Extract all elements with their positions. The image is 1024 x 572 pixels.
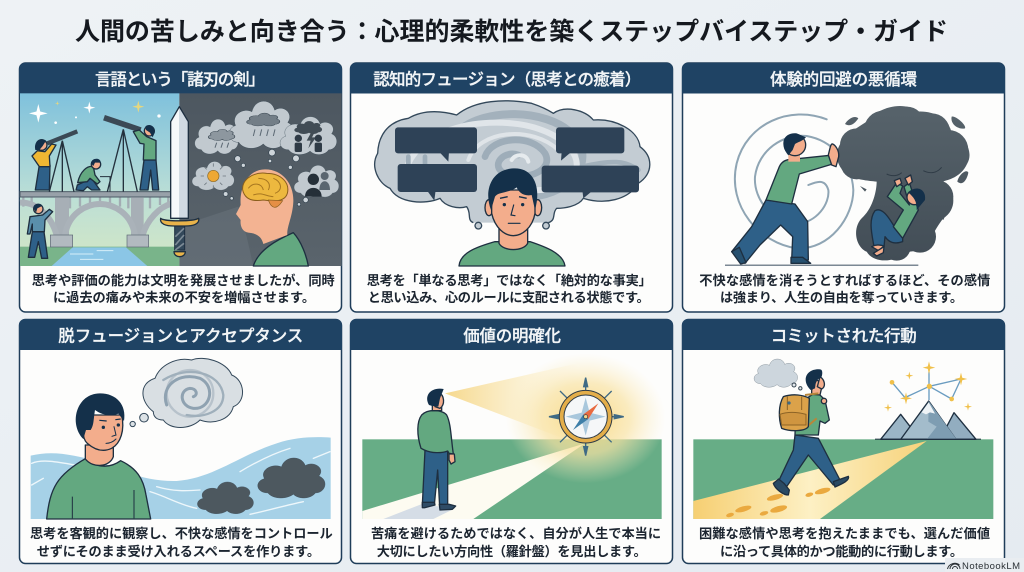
panel description: 思考を「単なる思考」ではなく「絶対的な事実」 xyxy=(367,272,652,288)
hiker with backpack xyxy=(773,369,849,495)
illustration: person looking toward compass xyxy=(362,353,666,519)
dark speech bubbles xyxy=(395,127,639,201)
green ground xyxy=(693,439,993,519)
compass xyxy=(549,378,624,456)
panel heading: 脱フュージョンとアクセプタンス xyxy=(58,326,303,346)
standing person from behind xyxy=(418,389,456,510)
panel: clarifying values xyxy=(350,319,673,564)
green ground xyxy=(362,439,662,519)
panel description xyxy=(699,272,990,305)
panel heading: 価値の明確化 xyxy=(463,326,562,346)
panel: cognitive fusion xyxy=(350,63,673,312)
illustration: person under thought cloud xyxy=(375,101,650,266)
bridge and river xyxy=(20,192,179,266)
panel: experiential avoidance xyxy=(682,63,1005,312)
telescope watcher in green xyxy=(104,118,159,192)
illustration: observing thoughts and feelings xyxy=(31,358,331,519)
panel description xyxy=(32,272,335,305)
person below the bridge xyxy=(27,204,53,258)
calm man xyxy=(47,393,151,519)
sword xyxy=(160,107,199,257)
thought bubble with swirl xyxy=(130,358,243,427)
panel description: 困難な感情や思考を抱えたままでも、選んだ価値 xyxy=(699,525,990,541)
golden path xyxy=(693,441,927,519)
panel description xyxy=(371,525,661,559)
footprints xyxy=(726,486,831,518)
NotebookLM watermark: NotebookLM xyxy=(962,561,1020,572)
panel description: 思考を客観的に観察し、不快な感情をコントロール xyxy=(30,525,333,541)
panel description: と思い込み、心のルールに支配される状態です。 xyxy=(368,289,650,305)
panel description: せずにそのまま受け入れるスペースを作ります。 xyxy=(37,543,320,559)
spiral xyxy=(735,114,853,248)
panel description: は強まり、人生の自由を奪っていきます。 xyxy=(720,289,963,305)
worried person xyxy=(459,168,565,266)
panel heading: 体験的回避の悪循環 xyxy=(770,70,917,89)
panel heading: コミットされた行動 xyxy=(771,326,917,346)
big thought cloud xyxy=(375,101,650,223)
panel description xyxy=(30,525,333,559)
illustration: pushing away dark cloud xyxy=(725,106,970,266)
thought dots xyxy=(475,222,549,229)
panel heading: 言語という「諸刃の剣」 xyxy=(95,70,265,89)
panel: committed action xyxy=(682,319,1005,564)
mountains xyxy=(875,401,981,440)
title: 人間の苦しみと向き合う：心理的柔軟性を築くステップバイステップ・ガイド xyxy=(75,18,948,46)
panel description: 苦痛を避けるためではなく、自分が人生で本当に xyxy=(371,525,661,541)
kneeling person in green xyxy=(76,159,110,192)
worry clouds xyxy=(192,101,339,197)
panel description: に過去の痛みや未来の不安を増幅させます。 xyxy=(53,289,315,305)
panel description: 不快な感情を消そうとすればするほど、その感情 xyxy=(699,272,990,288)
small thought cloud xyxy=(754,359,802,390)
path to compass xyxy=(362,443,585,519)
person trapped in cloud xyxy=(871,175,925,256)
illustration: sword between civilization and worry xyxy=(20,93,342,266)
gaze beam xyxy=(445,362,585,439)
panel description: 思考や評価の能力は文明を発展させましたが、同時 xyxy=(32,272,335,288)
telescope watcher in yellow xyxy=(32,131,77,192)
head with brain xyxy=(236,169,308,266)
dark emotion cloud xyxy=(837,106,970,261)
pushing man xyxy=(732,133,839,264)
stars xyxy=(29,101,161,124)
dark feeling clouds xyxy=(197,458,325,514)
flowing river xyxy=(31,437,331,519)
panel description: 大切にしたい方向性（羅針盤）を見出します。 xyxy=(377,543,647,559)
constellation xyxy=(884,361,972,412)
cloud contents xyxy=(201,113,330,206)
panel description xyxy=(699,525,990,559)
panel: language double-edged sword xyxy=(19,63,342,312)
ground line xyxy=(725,265,918,266)
panel description: に沿って具体的かつ能動的に行動します。 xyxy=(720,543,963,559)
NotebookLM watermark xyxy=(945,558,1024,572)
panel description xyxy=(367,272,652,305)
sun glow xyxy=(506,353,666,483)
panel: defusion and acceptance xyxy=(19,319,342,564)
panel heading: 認知的フュージョン（思考との癒着） xyxy=(373,70,641,89)
swirl xyxy=(408,114,638,197)
illustration: hiker walking toward mountains xyxy=(693,359,993,519)
